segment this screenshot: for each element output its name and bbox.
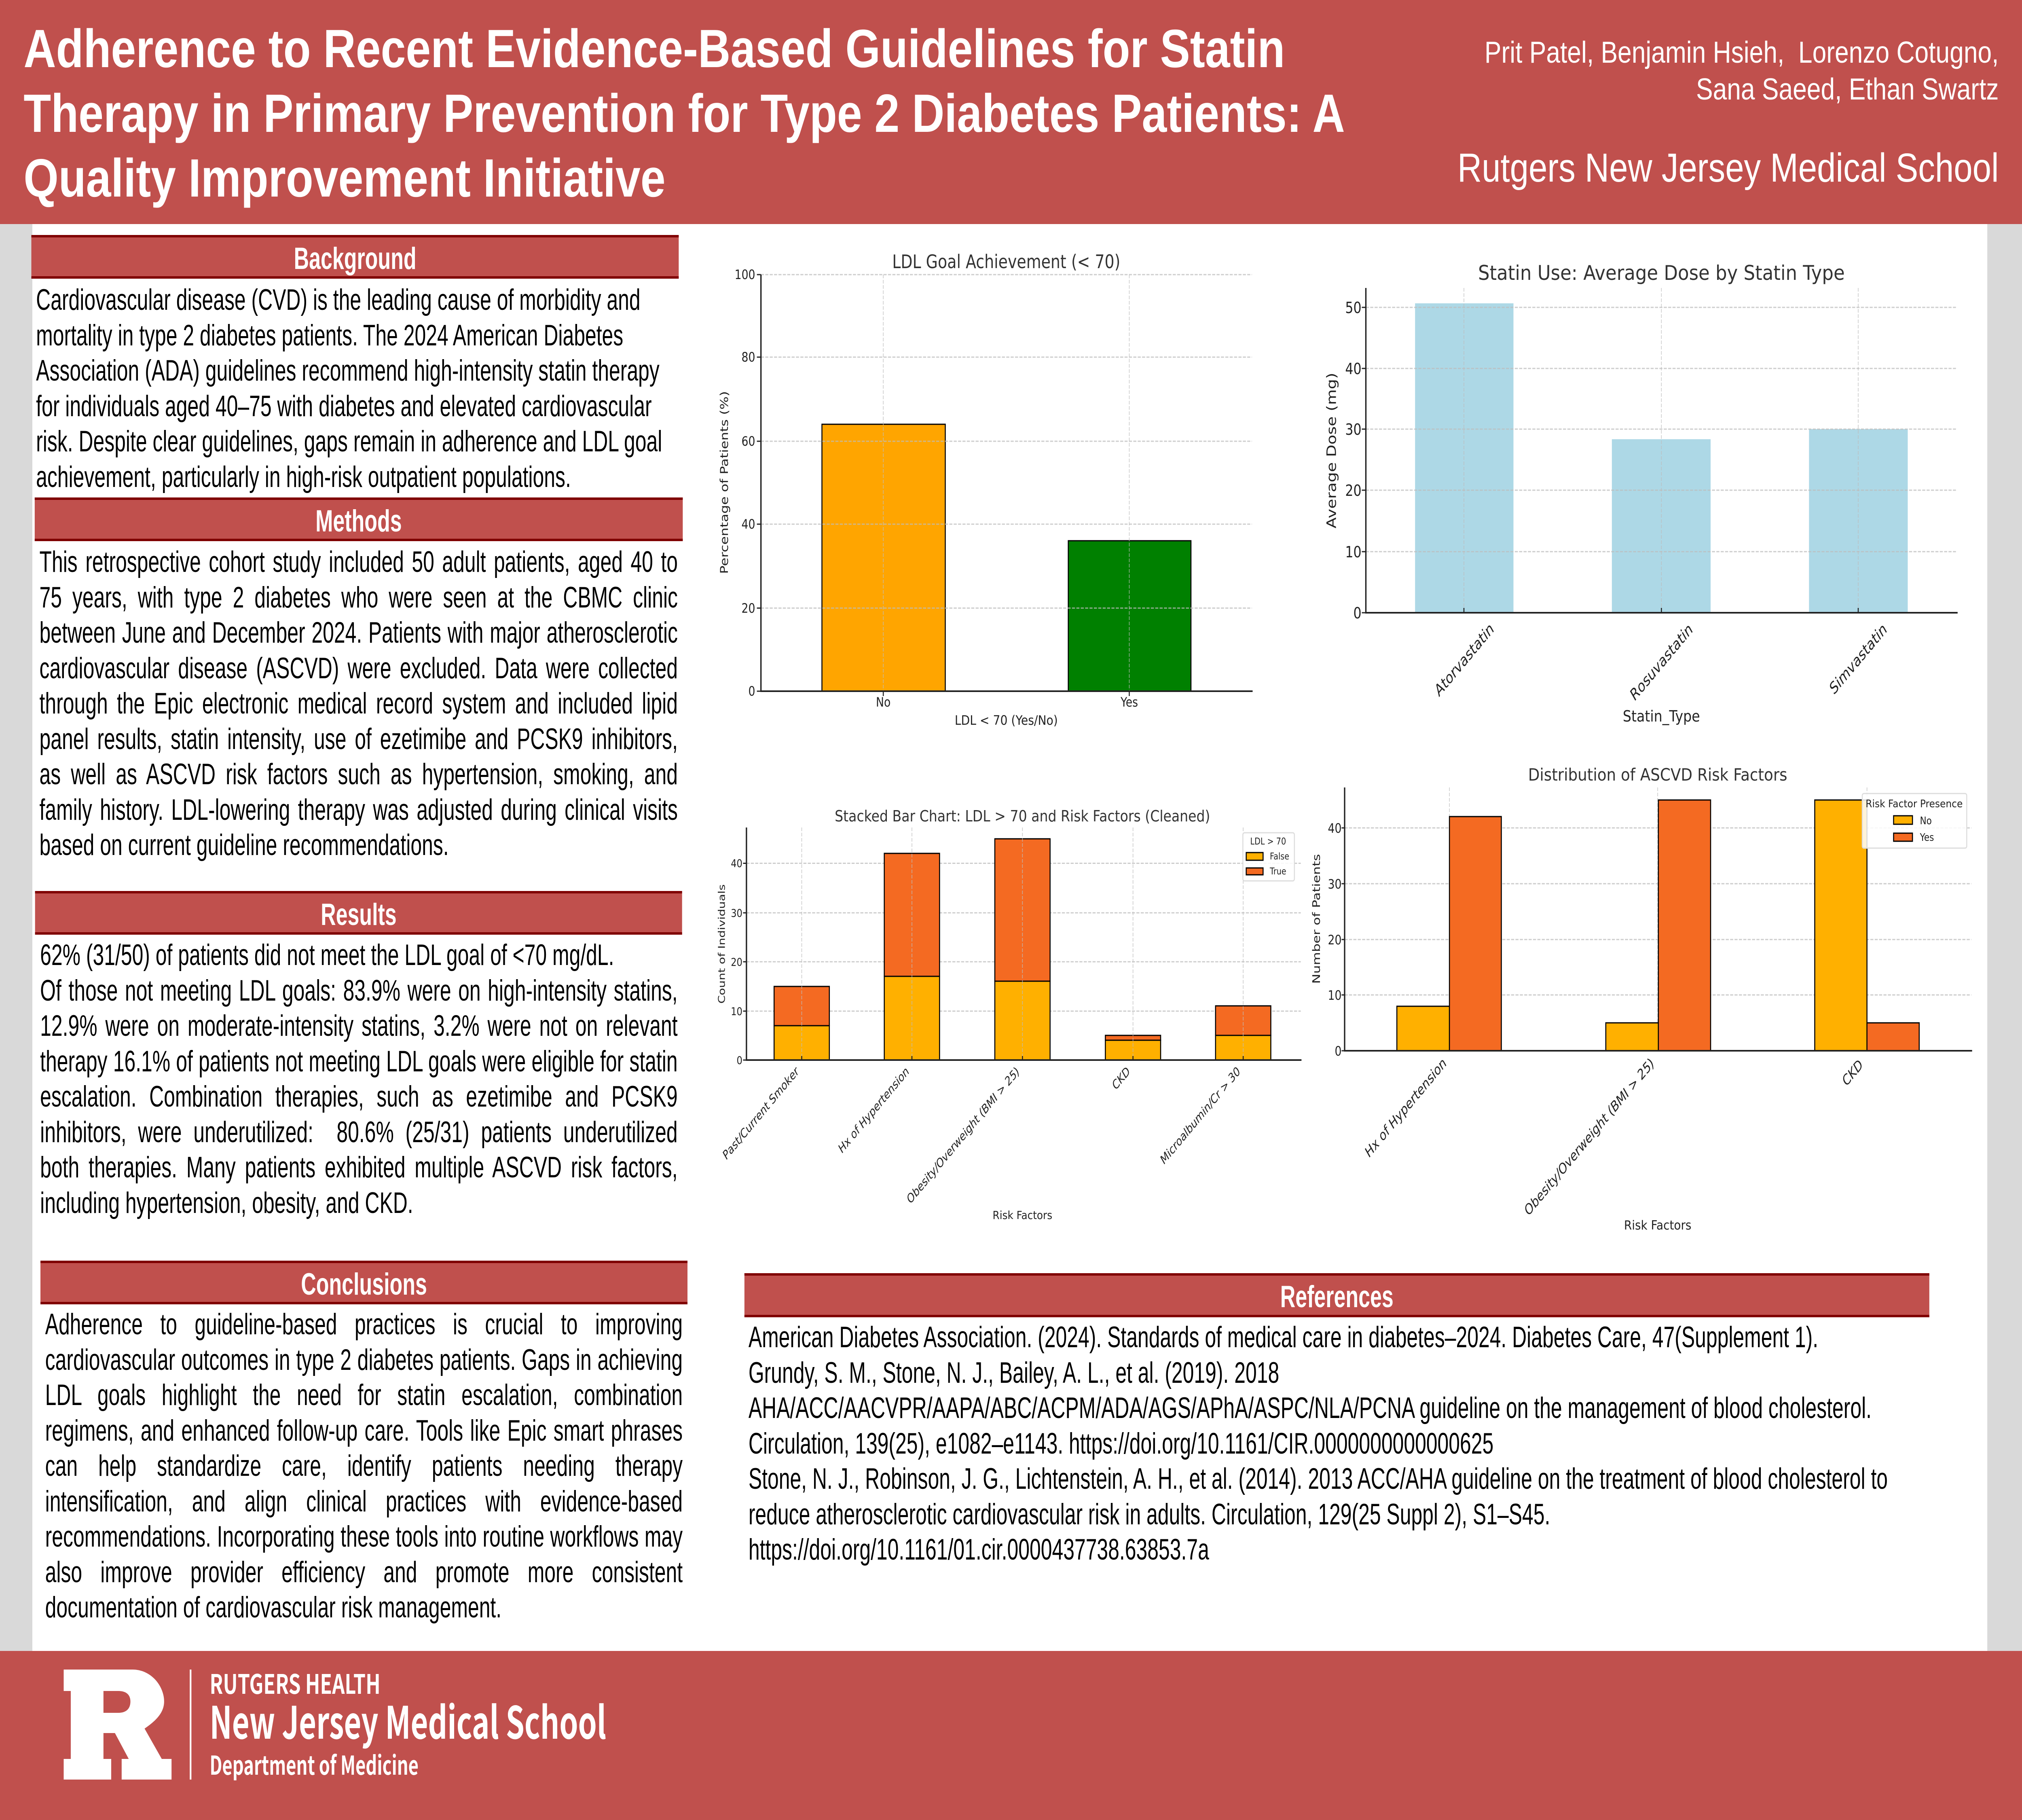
text: conclusions <box>45 1307 683 1625</box>
text: results: 12.9% were on moderate-intensity statins, 3.2% were not on relevant <box>40 1009 678 1042</box>
chart title: Stacked Bar Chart: LDL > 70 and Risk Factors (Cleaned) <box>835 808 1210 825</box>
x tick labels: Past/Current Smoker <box>720 1064 802 1162</box>
text: results: 62% (31/50) of patients did not meet the LDL goal of <70 mg/dL. <box>40 939 614 971</box>
x tick labels <box>720 1064 1243 1206</box>
x tick labels: Obesity/Overweight (BMI > 25) <box>905 1065 1022 1206</box>
legend <box>1243 833 1294 881</box>
icon: block R <box>63 1670 171 1780</box>
text: results: both therapies. Many patients exhibited multiple ASCVD risk factors, <box>40 1151 678 1184</box>
text: background <box>36 282 699 495</box>
y tick labels: 30 <box>1328 877 1341 892</box>
stack: hypertension <box>884 853 939 1060</box>
x tick labels: Atorvastatin <box>1431 620 1497 700</box>
x tick labels: CKD <box>1110 1065 1133 1092</box>
x axis label: Statin_Type <box>1623 708 1700 726</box>
y tick labels: 10 <box>1328 988 1341 1003</box>
y tick labels: 10 <box>731 1005 742 1018</box>
logo: Rutgers Health New Jersey Medical School <box>0 0 674 1820</box>
chart title: LDL Goal Achievement (< 70) <box>892 251 1120 273</box>
text: methods: This retrospective cohort study included 50 adult patients, aged 40 to <box>39 546 678 578</box>
bar: Simvastatin <box>1809 429 1908 613</box>
text: results: escalation. Combination therapies, such as ezetimibe and PCSK9 <box>40 1080 678 1113</box>
y tick labels: 60 <box>742 434 755 449</box>
bar: No <box>822 424 945 691</box>
text: methods: panel results, statin intensity, use of ezetimibe and PCSK9 inhibitors, <box>39 722 678 756</box>
bar: Yes <box>1068 541 1191 691</box>
text: results: inhibitors, were underutilized: 80.6% (25/31) patients underutilized <box>40 1115 678 1149</box>
text: results <box>40 938 678 1221</box>
poster title: Adherence to Recent Evidence-Based Guidelines for Statin <box>23 19 1285 79</box>
authors: Prit Patel, Benjamin Hsieh, Lorenzo Cotugno, Sana Saeed, Ethan Swartz <box>1485 35 1999 106</box>
bar: Atorvastatin <box>1415 303 1513 613</box>
stack: CKD <box>1105 1035 1161 1060</box>
text: results: therapy 16.1% of patients not meeting LDL goals were eligible for statin <box>40 1045 678 1077</box>
text: conclusions: documentation of cardiovascular risk management. <box>45 1591 501 1624</box>
text: background: risk. Despite clear guidelines, gaps remain in adherence and LDL goal <box>36 425 662 458</box>
x tick labels <box>876 695 1138 710</box>
y tick labels <box>731 857 742 1067</box>
y tick labels: 80 <box>742 350 755 365</box>
chart: statin average dose <box>1307 251 1982 736</box>
y tick labels <box>1328 821 1341 1059</box>
stack: microalbumin <box>1216 1006 1271 1060</box>
text: references: AHA/ACC/AACVPR/AAPA/ABC/ACPM/ADA/AGS/APhA/ASPC/NLA/PCNA guideline on the management of blood cholesterol. <box>749 1392 1872 1424</box>
text: methods <box>39 544 678 863</box>
legend: True <box>1269 866 1286 876</box>
bars: obesity/overweight <box>1606 800 1711 1051</box>
y tick labels: 20 <box>1328 933 1341 948</box>
y tick labels: 40 <box>731 857 742 870</box>
y axis label: Average Dose (mg) <box>1324 373 1339 528</box>
legend: Yes <box>1920 831 1934 844</box>
x tick labels: CKD <box>1840 1057 1866 1089</box>
x tick labels <box>1431 620 1891 704</box>
legend: No <box>1920 815 1932 827</box>
text: methods: through the Epic electronic medical record system and included lipid <box>39 687 678 720</box>
heading: references: References <box>1280 1280 1394 1314</box>
heading: results <box>35 891 682 935</box>
y tick labels: 100 <box>735 267 755 282</box>
poster title: Quality Improvement Initiative <box>23 148 666 208</box>
legend: LDL > 70 <box>1250 836 1286 847</box>
logo text: Department of Medicine: Department of Medicine <box>209 1745 419 1782</box>
logo text: Rutgers Health: RUTGERS HEALTH <box>209 1663 381 1702</box>
chart title: Distribution of ASCVD Risk Factors <box>1528 765 1787 785</box>
legend: False <box>1270 851 1289 861</box>
chart title: Statin Use: Average Dose by Statin Type <box>1478 261 1845 285</box>
chart: distribution of ASCVD risk factors <box>1307 760 1982 1246</box>
y tick labels: 20 <box>742 601 755 616</box>
stack: obesity/overweight <box>995 839 1050 1060</box>
text: references: American Diabetes Association. (2024). Standards of medical care in diabetes–2024. Diabetes Care, 47(Supplement 1). <box>749 1321 1818 1354</box>
y tick labels: 30 <box>731 907 742 920</box>
text: background: Association (ADA) guidelines recommend high-intensity statin therapy <box>36 354 660 387</box>
text: references: reduce atherosclerotic cardiovascular risk in adults. Circulation, 129(25 Suppl 2), S1–S45. <box>749 1498 1550 1530</box>
text: background: for individuals aged 40–75 with diabetes and elevated cardiovascular <box>36 390 652 422</box>
text: references: https://doi.org/10.1161/01.cir.0000437738.63853.7a <box>749 1533 1209 1566</box>
logo text: New Jersey Medical School: New Jersey Medical School <box>209 1688 606 1752</box>
text: methods: based on current guideline recommendations. <box>39 829 449 861</box>
bars: hypertension <box>1397 817 1501 1051</box>
text: background: mortality in type 2 diabetes patients. The 2024 American Diabetes <box>36 319 623 352</box>
text: references: Grundy, S. M., Stone, N. J., Bailey, A. L., et al. (2019). 2018 <box>749 1357 1279 1389</box>
x tick labels: Obesity/Overweight (BMI > 25) <box>1522 1055 1657 1219</box>
chart: LDL goal achievement <box>708 239 1281 740</box>
y axis label: Number of Patients <box>1311 854 1322 984</box>
text: conclusions: cardiovascular outcomes in type 2 diabetes patients. Gaps in achieving <box>45 1344 683 1376</box>
y tick labels: 10 <box>1345 544 1362 561</box>
x tick labels: Hx of Hypertension <box>1362 1055 1449 1160</box>
x axis label: LDL < 70 (Yes/No) <box>955 713 1058 728</box>
heading: references <box>745 1273 1929 1317</box>
y tick labels: 50 <box>1345 299 1362 317</box>
x axis label: Risk Factors <box>993 1209 1052 1222</box>
y tick labels: 0 <box>737 1054 742 1067</box>
y tick labels <box>735 267 755 699</box>
x tick labels <box>1362 1055 1866 1219</box>
footer banner <box>0 1651 2022 1820</box>
text: results: including hypertension, obesity, and CKD. <box>40 1187 413 1219</box>
heading: conclusions <box>40 1261 687 1304</box>
text: methods: cardiovascular disease (ASCVD) were excluded. Data were collected <box>39 652 678 684</box>
y tick labels: 0 <box>1354 605 1362 622</box>
y tick labels: 40 <box>742 517 755 532</box>
x tick labels: Yes <box>1120 695 1138 710</box>
x axis label: Risk Factors <box>1624 1218 1691 1233</box>
institution: Rutgers New Jersey Medical School <box>1457 145 1999 190</box>
text: references: Stone, N. J., Robinson, J. G., Lichtenstein, A. H., et al. (2014). 2013 ACC/AHA guideline on the treatment of blood cholesterol to <box>749 1462 1888 1495</box>
text: conclusions: also improve provider efficiency and promote more consistent <box>45 1555 683 1589</box>
text: conclusions: LDL goals highlight the need for statin escalation, combination <box>45 1379 683 1412</box>
legend <box>1862 794 1967 848</box>
y axis label: Count of Individuals <box>717 884 728 1004</box>
heading: background <box>31 235 679 279</box>
chart: stacked bar LDL and risk factors <box>708 801 1307 1230</box>
legend: Risk Factor Presence <box>1865 798 1963 810</box>
poster title <box>23 17 1405 211</box>
text: background: Cardiovascular disease (CVD) is the leading cause of morbidity and <box>36 284 641 316</box>
y tick labels: 20 <box>731 956 742 969</box>
text: references: Circulation, 139(25), e1082–e1143. https://doi.org/10.1161/CIR.0000000000000625 <box>749 1427 1493 1460</box>
heading: methods: Methods <box>315 504 402 538</box>
text: conclusions: intensification, and align clinical practices with evidence-based <box>45 1485 683 1517</box>
text: methods: 75 years, with type 2 diabetes who were seen at the CBMC clinic <box>39 581 678 614</box>
x tick labels: No <box>876 695 890 710</box>
text: results: Of those not meeting LDL goals: 83.9% were on high-intensity statins, <box>40 974 678 1007</box>
text: conclusions: Adherence to guideline-based practices is crucial to improving <box>45 1308 683 1341</box>
white content panel <box>32 224 1987 1651</box>
text: background: achievement, particularly in high-risk outpatient populations. <box>36 460 571 493</box>
x tick labels: Rosuvastatin <box>1627 621 1696 704</box>
x tick labels: Hx of Hypertension <box>836 1065 912 1155</box>
text: conclusions: regimens, and enhanced follow-up care. Tools like Epic smart phrases <box>45 1414 683 1447</box>
x tick labels: Simvastatin <box>1826 621 1891 697</box>
text: conclusions: can help standardize care, identify patients needing therapy <box>45 1450 683 1482</box>
text: methods: as well as ASCVD risk factors such as hypertension, smoking, and <box>39 758 678 791</box>
text: conclusions: recommendations. Incorporating these tools into routine workflows may <box>45 1520 683 1553</box>
heading: methods <box>35 497 683 541</box>
text: references <box>749 1320 1923 1568</box>
text: methods: family history. LDL-lowering therapy was adjusted during clinical visits <box>39 794 678 826</box>
y tick labels <box>1345 299 1362 622</box>
y tick labels: 30 <box>1345 421 1362 439</box>
heading: conclusions: Conclusions <box>301 1267 427 1302</box>
bars: CKD <box>1815 800 1919 1051</box>
heading: background: Background <box>294 241 416 276</box>
bar: Rosuvastatin <box>1612 439 1711 613</box>
x tick labels: Microalbumin/Cr > 30 <box>1158 1065 1243 1167</box>
y tick labels: 20 <box>1345 482 1362 500</box>
y tick labels: 0 <box>749 684 755 699</box>
text: methods: between June and December 2024. Patients with major atherosclerotic <box>39 616 678 649</box>
y axis label: Percentage of Patients (%) <box>718 391 730 574</box>
stack: past/current smoker <box>774 986 829 1060</box>
poster title: Therapy in Primary Prevention for Type 2 Diabetes Patients: A <box>23 83 1345 144</box>
y tick labels: 40 <box>1345 360 1362 378</box>
y tick labels: 0 <box>1335 1044 1341 1059</box>
heading: results: Results <box>321 897 396 932</box>
header banner <box>0 0 2022 224</box>
y tick labels: 40 <box>1328 821 1341 836</box>
